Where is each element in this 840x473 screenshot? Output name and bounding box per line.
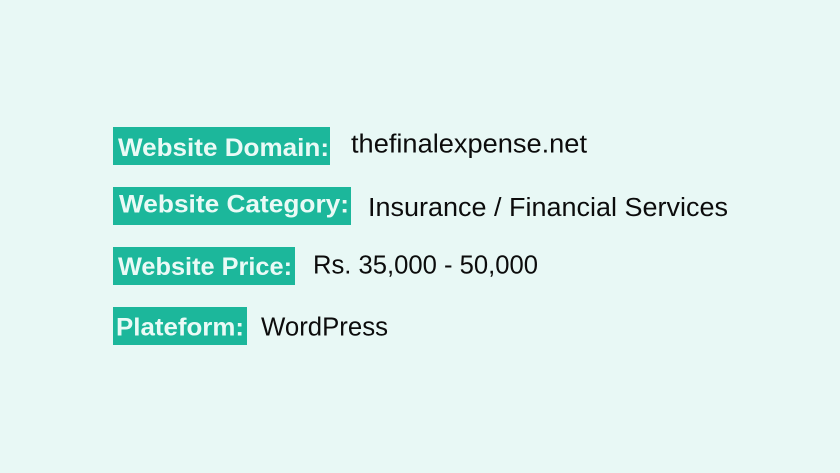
row: website domain: thefinalexpense.net [351, 130, 587, 158]
row: website category: Insurance / Financial Services [368, 194, 728, 222]
row: website domain [113, 127, 587, 165]
row: platform: Plateform: [116, 314, 244, 342]
row: website category [113, 187, 728, 225]
row: website category: Website Category: [119, 190, 349, 218]
row: website price: Rs. 35,000 - 50,000 [313, 252, 538, 280]
row: platform: WordPress [261, 314, 388, 342]
row: website price: Website Price: [118, 253, 292, 281]
row: website domain: Website Domain: [118, 134, 329, 162]
row: platform [113, 307, 388, 345]
row: website price [113, 247, 538, 285]
